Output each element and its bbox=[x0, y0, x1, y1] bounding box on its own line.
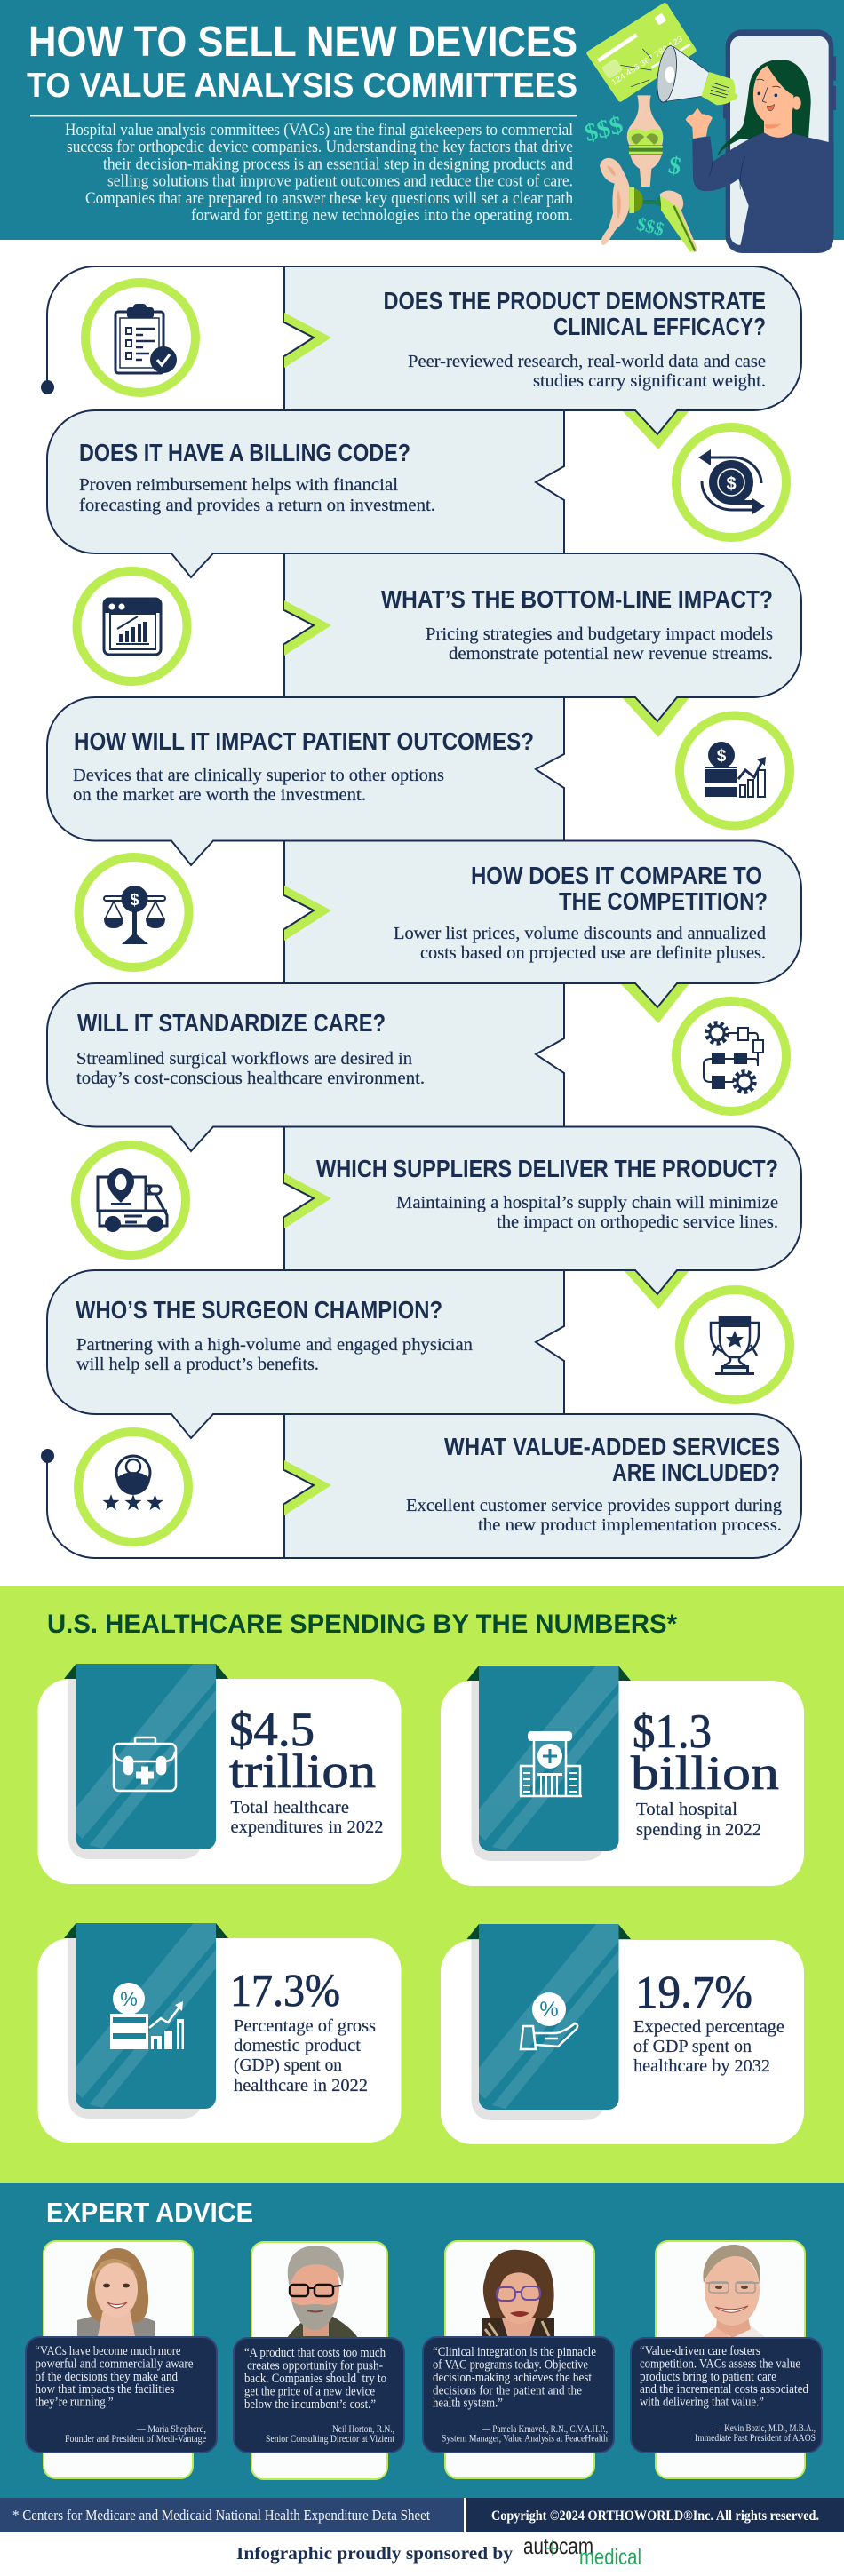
icon: balance scale bbox=[104, 886, 165, 944]
expert: Pamela Krnavek bbox=[423, 2241, 614, 2478]
sponsor logo bbox=[523, 2532, 641, 2570]
quote text: powerful and commercially aware bbox=[36, 2357, 194, 2371]
panel: suppliers: the impact on orthopedic service lines. bbox=[497, 1212, 778, 1232]
intro paragraph: Companies that are prepared to answer these key questions will set a clear path bbox=[85, 190, 573, 208]
panel: patient outcomes: HOW WILL IT IMPACT PATIENT OUTCOMES? bbox=[74, 727, 534, 755]
stat card: hospital spending: spending in 2022 bbox=[636, 1820, 761, 1840]
icon: balance scale: $ bbox=[130, 891, 139, 909]
icon: delivery truck with pin bbox=[98, 1168, 167, 1232]
panel: surgeon champion bbox=[47, 1270, 790, 1438]
quote text bbox=[36, 2344, 206, 2445]
panel: billing code: DOES IT HAVE A BILLING CODE? bbox=[79, 439, 410, 466]
illustration: knee implant bbox=[627, 95, 663, 187]
hero illustration bbox=[582, 5, 836, 253]
panel: value-added services bbox=[41, 1414, 801, 1558]
portrait: Neil Horton bbox=[287, 2246, 358, 2338]
quote text: Neil Horton, R.N., bbox=[332, 2422, 394, 2435]
title: HOW TO SELL NEW DEVICES bbox=[28, 19, 577, 66]
panel: clinical efficacy: studies carry significant weight. bbox=[533, 371, 766, 391]
panel: competition: Lower list prices, volume discounts and annualized bbox=[394, 924, 766, 943]
quote text: health system.” bbox=[433, 2397, 503, 2411]
panel: bottom-line impact: demonstrate potential new revenue streams. bbox=[449, 644, 773, 664]
stat card: percent of GDP 2032: of GDP spent on bbox=[633, 2037, 752, 2056]
icon: medical briefcase bbox=[114, 1737, 176, 1791]
icon: dollar circular arrows: $ bbox=[726, 474, 737, 494]
panel: competition: costs based on projected use are definite pluses. bbox=[420, 943, 766, 963]
stat card: total expenditures: trillion bbox=[229, 1745, 376, 1798]
quote text: “VACs have become much more bbox=[36, 2344, 181, 2358]
header band bbox=[0, 0, 844, 240]
panel: clinical efficacy bbox=[41, 266, 801, 449]
stat card: hospital spending: Total hospital bbox=[636, 1800, 737, 1819]
panel: spending section bbox=[0, 1586, 844, 2183]
stat card: total expenditures: Total healthcare bbox=[231, 1798, 349, 1817]
panel: billing code bbox=[47, 410, 786, 577]
icon: coin stack and growth chart bbox=[705, 742, 766, 797]
heading: spending: U.S. HEALTHCARE SPENDING BY THE NUMBERS* bbox=[47, 1610, 677, 1639]
illustration: phone and woman bbox=[686, 29, 836, 253]
quote text: of the decisions they make and bbox=[36, 2370, 179, 2384]
quote text: “Clinical integration is the pinnacle bbox=[433, 2345, 596, 2359]
expert: Neil Horton bbox=[234, 2242, 404, 2479]
panel: patient outcomes bbox=[47, 697, 790, 865]
icon: trophy bbox=[711, 1317, 759, 1375]
stat card: total expenditures bbox=[37, 1664, 402, 1884]
illustration: hip implant bbox=[600, 158, 697, 252]
stat card: percent of GDP 2032: Expected percentage bbox=[633, 2017, 784, 2037]
quote text: — Pamela Krnavek, R.N., C.V.A.H.P., bbox=[482, 2422, 608, 2435]
panel: patient outcomes: Devices that are clinically superior to other options bbox=[73, 766, 444, 785]
stat card: percent of GDP 2032: 19.7% bbox=[635, 1968, 752, 2018]
panel: competition bbox=[78, 840, 801, 1023]
icon: hand holding percent: % bbox=[539, 1998, 559, 2022]
panel: standardize care: today’s cost-conscious healthcare environment. bbox=[76, 1069, 425, 1088]
illustration: dollar signs: $$$ bbox=[634, 214, 665, 240]
quote text: they’re running.” bbox=[36, 2396, 114, 2410]
stat card: percent of GDP 2022: (GDP) spent on bbox=[234, 2055, 342, 2075]
title: TO VALUE ANALYSIS COMMITTEES bbox=[27, 67, 577, 105]
stat card: percent of GDP 2022 bbox=[37, 1923, 402, 2143]
intro paragraph: forward for getting new technologies into the operating room. bbox=[191, 207, 573, 225]
quote text: decisions for the patient and the bbox=[433, 2383, 582, 2397]
footer: copyright bbox=[466, 2498, 844, 2532]
quote text: with delivering that value.” bbox=[640, 2396, 764, 2410]
panel: competition: HOW DOES IT COMPARE TO bbox=[471, 862, 762, 889]
quote text: of VAC programs today. Objective bbox=[433, 2357, 588, 2372]
portrait: Pamela Krnavek bbox=[482, 2250, 554, 2338]
stat card: total expenditures: $4.5 bbox=[229, 1703, 315, 1756]
illustration: dollar signs: $ bbox=[666, 152, 683, 181]
quote text: — Maria Shepherd, bbox=[136, 2422, 206, 2435]
icon: coin stack and growth chart: $ bbox=[717, 747, 727, 766]
illustration: dollar signs: $$$ bbox=[582, 111, 626, 147]
quote text: Immediate Past President of AAOS bbox=[695, 2431, 816, 2444]
stat card: percent of GDP 2022: healthcare in 2022 bbox=[234, 2076, 368, 2095]
quote text bbox=[244, 2346, 395, 2445]
icon: hand holding percent bbox=[521, 1992, 577, 2049]
icon: person with three stars bbox=[102, 1456, 163, 1510]
quote text bbox=[433, 2345, 608, 2445]
panel: value-added services: Excellent customer service provides support during bbox=[406, 1496, 782, 1515]
panel: value-added services: the new product implementation process. bbox=[478, 1515, 782, 1535]
panel: surgeon champion: Partnering with a high-volume and engaged physician bbox=[76, 1335, 473, 1355]
panel: bottom-line impact bbox=[76, 553, 801, 737]
stat card: percent of GDP 2022: 17.3% bbox=[230, 1966, 340, 2016]
stat card: hospital spending bbox=[441, 1666, 804, 1886]
panel: standardize care bbox=[47, 983, 786, 1151]
quote text: and the incremental costs associated bbox=[640, 2382, 809, 2397]
quote text: how that impacts the facilities bbox=[36, 2382, 175, 2397]
illustration: credit card bbox=[589, 5, 694, 99]
panel: value-added services: ARE INCLUDED? bbox=[612, 1459, 780, 1486]
panel: clinical efficacy: CLINICAL EFFICACY? bbox=[553, 313, 766, 340]
panel: suppliers: WHICH SUPPLIERS DELIVER THE PRODUCT? bbox=[316, 1155, 778, 1182]
quote text: “Value-driven care fosters bbox=[640, 2344, 760, 2358]
intro paragraph: selling solutions that improve patient outcomes and reduce the cost of care. bbox=[107, 172, 573, 190]
icon: dollar circular arrows bbox=[698, 449, 765, 514]
stat card: percent of GDP 2022: domestic product bbox=[234, 2036, 361, 2055]
intro paragraph: Hospital value analysis committees (VACs) are the final gatekeepers to commercial bbox=[65, 122, 573, 139]
panel: standardize care: WILL IT STANDARDIZE CARE? bbox=[77, 1009, 386, 1037]
panel: standardize care: Streamlined surgical workflows are desired in bbox=[76, 1049, 412, 1069]
icon: percent coin and chart: % bbox=[120, 1988, 138, 2010]
stat card: total expenditures: expenditures in 2022 bbox=[231, 1817, 384, 1837]
illustration: credit card: 124 456 367 789 123 bbox=[609, 34, 684, 87]
panel: suppliers: Maintaining a hospital’s supply chain will minimize bbox=[396, 1193, 778, 1212]
quote text: products bring to patient care bbox=[640, 2370, 776, 2384]
panel: surgeon champion: will help sell a product’s benefits. bbox=[76, 1355, 319, 1374]
panel: bottom-line impact: Pricing strategies and budgetary impact models bbox=[426, 624, 773, 644]
illustration: megaphone bbox=[654, 44, 738, 105]
expert: Maria Shepherd bbox=[26, 2241, 217, 2478]
icon: percent coin and chart bbox=[110, 1983, 184, 2049]
quote text: below the incumbent’s cost.” bbox=[244, 2397, 376, 2412]
heading: expert advice: EXPERT ADVICE bbox=[46, 2197, 253, 2228]
title bbox=[27, 19, 577, 105]
footer: source note: * Centers for Medicare and Medicaid National Health Expenditure Data Sheet bbox=[12, 2507, 430, 2524]
stat card: hospital spending: billion bbox=[631, 1746, 779, 1800]
panel: clinical efficacy: Peer-reviewed research, real-world data and case bbox=[408, 352, 766, 371]
stat card: percent of GDP 2032 bbox=[441, 1924, 804, 2144]
icon: clipboard bbox=[115, 304, 177, 373]
panel: billing code: Proven reimbursement helps with financial bbox=[79, 475, 398, 495]
stat card: hospital spending: $1.3 bbox=[633, 1705, 712, 1758]
icon: hospital bbox=[520, 1731, 582, 1796]
quote text: creates opportunity for push- bbox=[247, 2359, 383, 2373]
portrait: Maria Shepherd bbox=[77, 2248, 155, 2338]
icon: workflow gears bbox=[704, 1023, 763, 1093]
expert: Kevin Bozic bbox=[631, 2241, 822, 2478]
sponsor logo: medical bbox=[579, 2545, 641, 2570]
panel: billing code: forecasting and provides a return on investment. bbox=[79, 496, 435, 515]
icon: browser chart bbox=[104, 599, 161, 655]
quote text: competition. VACs assess the value bbox=[640, 2357, 800, 2371]
intro paragraph: success for orthopedic device companies. Understanding the key factors that drive bbox=[67, 139, 573, 156]
quote text: Founder and President of Medi-Vantage bbox=[65, 2432, 206, 2445]
sponsor line: Infographic proudly sponsored by bbox=[236, 2544, 513, 2564]
quote text: System Manager, Value Analysis at PeaceHealth bbox=[442, 2432, 608, 2445]
quote text: Senior Consulting Director at Vizient bbox=[266, 2432, 395, 2445]
sponsor logo: autocam bbox=[523, 2532, 593, 2559]
panel: expert advice bbox=[0, 2183, 844, 2498]
panel: suppliers bbox=[76, 1126, 801, 1309]
intro paragraph bbox=[65, 122, 574, 225]
stat card: percent of GDP 2022: Percentage of gross bbox=[234, 2016, 376, 2036]
quote text: back. Companies should try to bbox=[244, 2372, 386, 2386]
panel: value-added services: WHAT VALUE-ADDED SERVICES bbox=[444, 1433, 780, 1460]
panel: bottom-line impact: WHAT’S THE BOTTOM-LINE IMPACT? bbox=[381, 585, 773, 613]
panel: surgeon champion: WHO’S THE SURGEON CHAMPION? bbox=[76, 1296, 442, 1324]
footer: source note bbox=[0, 2498, 464, 2532]
quote text: get the price of a new device bbox=[244, 2384, 375, 2398]
stat card: percent of GDP 2032: healthcare by 2032 bbox=[633, 2056, 770, 2076]
quote text: “A product that costs too much bbox=[244, 2346, 386, 2360]
illustration: dollar signs bbox=[582, 111, 683, 240]
panel: patient outcomes: on the market are worth the investment. bbox=[73, 785, 366, 805]
quote text: decision-making achieves the best bbox=[433, 2371, 592, 2385]
intro paragraph: their decision-making process is an essential step in designing products and bbox=[103, 156, 574, 174]
panel: clinical efficacy: DOES THE PRODUCT DEMONSTRATE bbox=[384, 287, 766, 314]
portrait: Kevin Bozic bbox=[702, 2245, 766, 2338]
quote text bbox=[640, 2344, 816, 2444]
panel: competition: THE COMPETITION? bbox=[559, 887, 768, 915]
